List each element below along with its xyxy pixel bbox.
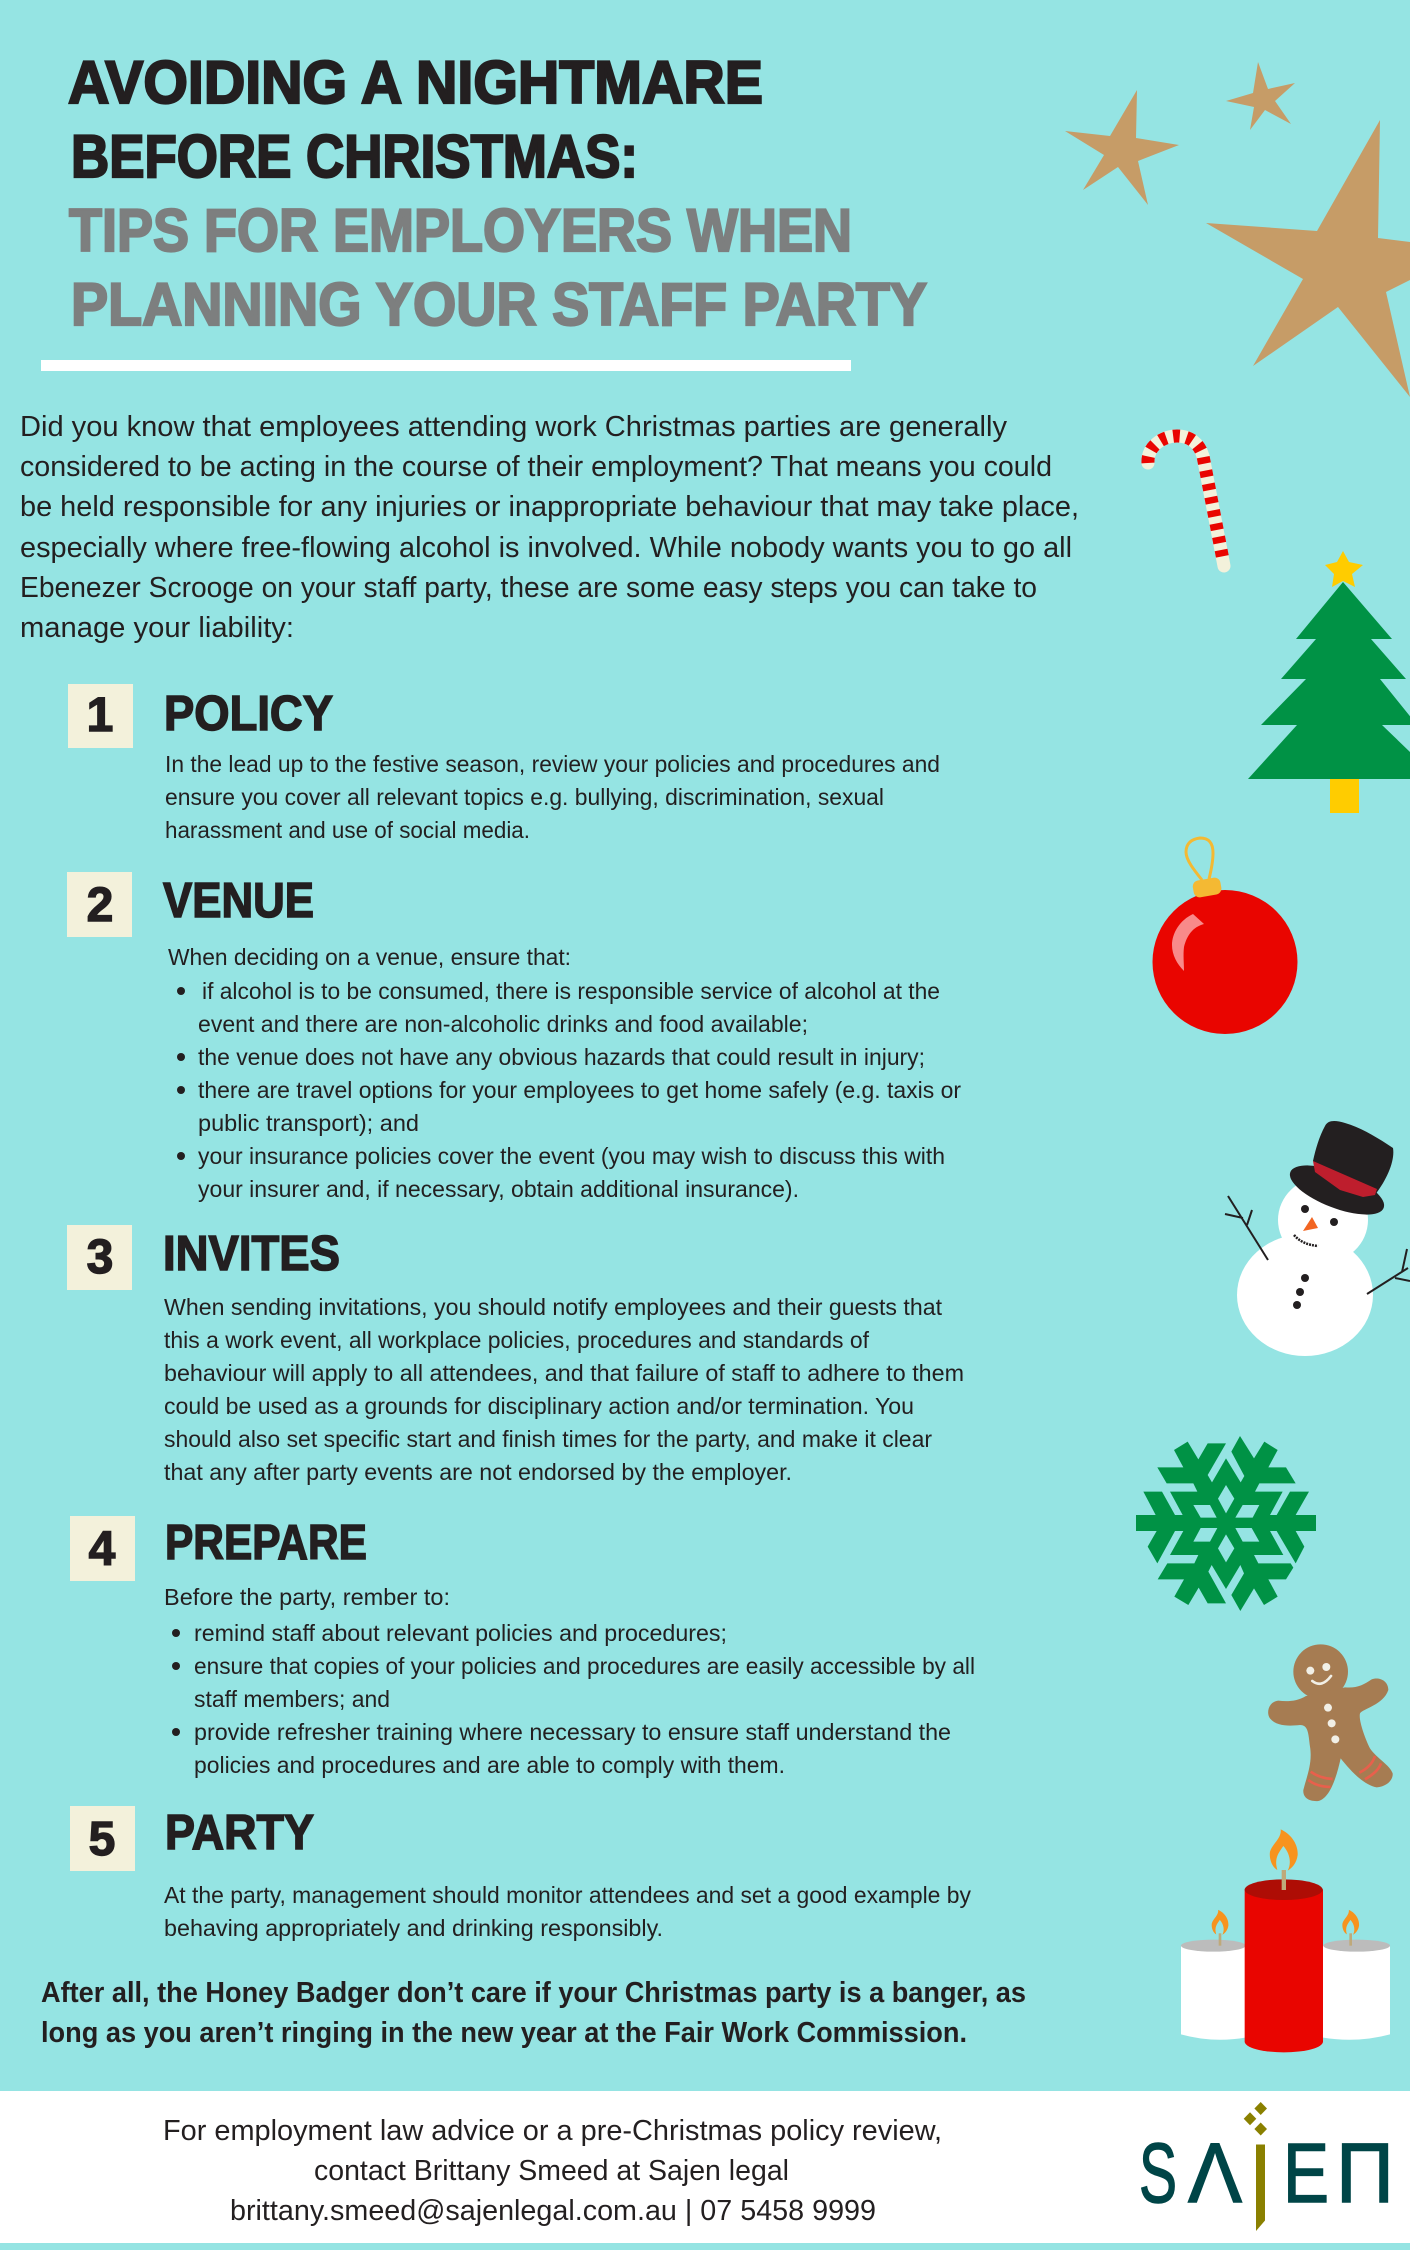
- icon: candy cane: [1148, 436, 1224, 566]
- icon: candles: [1181, 1829, 1390, 2052]
- title: TIPS FOR EMPLOYERS WHEN: [69, 197, 852, 264]
- venue text: public transport); and: [198, 1110, 419, 1136]
- icon: snowflake: [1136, 1436, 1316, 1611]
- icon: small top star: [1226, 62, 1295, 130]
- closing statement: After all, the Honey Badger don’t care if your Christmas party is a banger, as: [41, 1977, 1026, 2009]
- step 4: prepare: [70, 1516, 975, 1778]
- intro paragraph: Did you know that employees attending work Christmas parties are generally: [20, 411, 1008, 443]
- invites text: should also set specific start and finish times for the party, and make it clear: [164, 1426, 932, 1452]
- icon: christmas tree: [1248, 551, 1410, 813]
- step 5: party: [70, 1806, 971, 1941]
- invites text: that any after party events are not endorsed by the employer.: [164, 1459, 792, 1485]
- closing statement: long as you aren’t ringing in the new year at the Fair Work Commission.: [41, 2017, 967, 2049]
- venue text: When deciding on a venue, ensure that:: [168, 944, 571, 970]
- venue text: event and there are non-alcoholic drinks and food available;: [198, 1011, 808, 1037]
- invites text: this a work event, all workplace policies, procedures and standards of: [164, 1327, 870, 1353]
- prepare text: remind staff about relevant policies and procedures;: [194, 1620, 727, 1646]
- heading: party: PARTY: [165, 1806, 314, 1860]
- logo: Sajen: [1139, 2102, 1394, 2231]
- prepare text: provide refresher training where necessary to ensure staff understand the: [194, 1719, 951, 1745]
- logo: Sajen: E: [1283, 2126, 1329, 2220]
- step 1: policy: [68, 684, 940, 843]
- number badge 4: [70, 1516, 135, 1581]
- footer contact text: [163, 2115, 942, 2227]
- footer contact text: contact Brittany Smeed at Sajen legal: [314, 2155, 789, 2187]
- title: BEFORE CHRISTMAS:: [71, 123, 638, 190]
- number badge 5: [70, 1806, 135, 1871]
- intro paragraph: be held responsible for any injuries or inappropriate behaviour that may take place,: [20, 491, 1079, 523]
- prepare text: policies and procedures and are able to comply with them.: [194, 1752, 785, 1778]
- invites text: [164, 1294, 964, 1485]
- title: [68, 49, 927, 338]
- heading: venue: VENUE: [163, 874, 314, 928]
- intro paragraph: manage your liability:: [20, 612, 294, 644]
- invites text: could be used as a grounds for disciplinary action and/or termination. You: [164, 1393, 914, 1419]
- venue text: there are travel options for your employees to get home safely (e.g. taxis or: [198, 1077, 961, 1103]
- icon: bauble: [1152, 838, 1298, 1034]
- title: PLANNING YOUR STAFF PARTY: [71, 271, 927, 338]
- prepare text: staff members; and: [194, 1686, 390, 1712]
- intro paragraph: considered to be acting in the course of their employment? That means you could: [20, 451, 1052, 483]
- number badge 1: [68, 684, 133, 748]
- heading: policy: POLICY: [164, 687, 333, 741]
- intro paragraph: especially where free-flowing alcohol is involved. While nobody wants you to go all: [20, 532, 1072, 564]
- heading: invites: INVITES: [163, 1227, 340, 1281]
- number badge 2: 2: [87, 879, 113, 932]
- venue text: if alcohol is to be consumed, there is responsible service of alcohol at the: [202, 978, 940, 1004]
- intro paragraph: Ebenezer Scrooge on your staff party, these are some easy steps you can take to: [20, 572, 1037, 604]
- venue text: your insurer and, if necessary, obtain additional insurance).: [198, 1176, 799, 1202]
- number badge 3: 3: [87, 1231, 113, 1284]
- icon: gingerbread man: [1268, 1644, 1393, 1801]
- policy text: ensure you cover all relevant topics e.g. bullying, discrimination, sexual: [165, 784, 884, 810]
- policy text: In the lead up to the festive season, review your policies and procedures and: [165, 751, 940, 777]
- policy text: [165, 751, 940, 843]
- prepare text: ensure that copies of your policies and procedures are easily accessible by all: [194, 1653, 975, 1679]
- logo: Sajen: S: [1139, 2126, 1177, 2220]
- logo: Sajen: Π: [1336, 2126, 1394, 2220]
- number badge 5: 5: [89, 1813, 115, 1866]
- number badge 2: [67, 872, 132, 937]
- number badge 1: 1: [87, 689, 113, 742]
- icon: small left star: [1065, 90, 1179, 205]
- intro paragraph: [20, 411, 1079, 644]
- step 3: invites: [67, 1225, 964, 1485]
- prepare text: Before the party, rember to:: [164, 1584, 450, 1610]
- prepare text: [164, 1584, 975, 1778]
- venue text: your insurance policies cover the event (you may wish to discuss this with: [198, 1143, 945, 1169]
- number badge 3: [67, 1225, 132, 1290]
- number badge 4: 4: [89, 1523, 116, 1576]
- invites text: behaviour will apply to all attendees, and that failure of staff to adhere to them: [164, 1360, 964, 1386]
- step 2: venue: [67, 872, 961, 1202]
- footer contact text: brittany.smeed@sajenlegal.com.au | 07 5458 9999: [230, 2195, 876, 2227]
- footer contact text: For employment law advice or a pre-Christmas policy review,: [163, 2115, 942, 2147]
- footer band: [0, 2091, 1410, 2243]
- party text: [164, 1882, 971, 1941]
- venue text: the venue does not have any obvious hazards that could result in injury;: [198, 1044, 925, 1070]
- closing statement: [41, 1977, 1026, 2049]
- policy text: harassment and use of social media.: [165, 817, 530, 843]
- logo: Sajen: Λ: [1188, 2126, 1242, 2220]
- venue text: [168, 944, 961, 1202]
- icon: large star: [1206, 120, 1410, 397]
- icon: snowman: [1225, 1121, 1410, 1356]
- title: AVOIDING A NIGHTMARE: [68, 49, 763, 116]
- party text: At the party, management should monitor attendees and set a good example by: [164, 1882, 971, 1908]
- heading: prepare: PREPARE: [165, 1516, 367, 1570]
- party text: behaving appropriately and drinking responsibly.: [164, 1915, 663, 1941]
- invites text: When sending invitations, you should notify employees and their guests that: [164, 1294, 943, 1320]
